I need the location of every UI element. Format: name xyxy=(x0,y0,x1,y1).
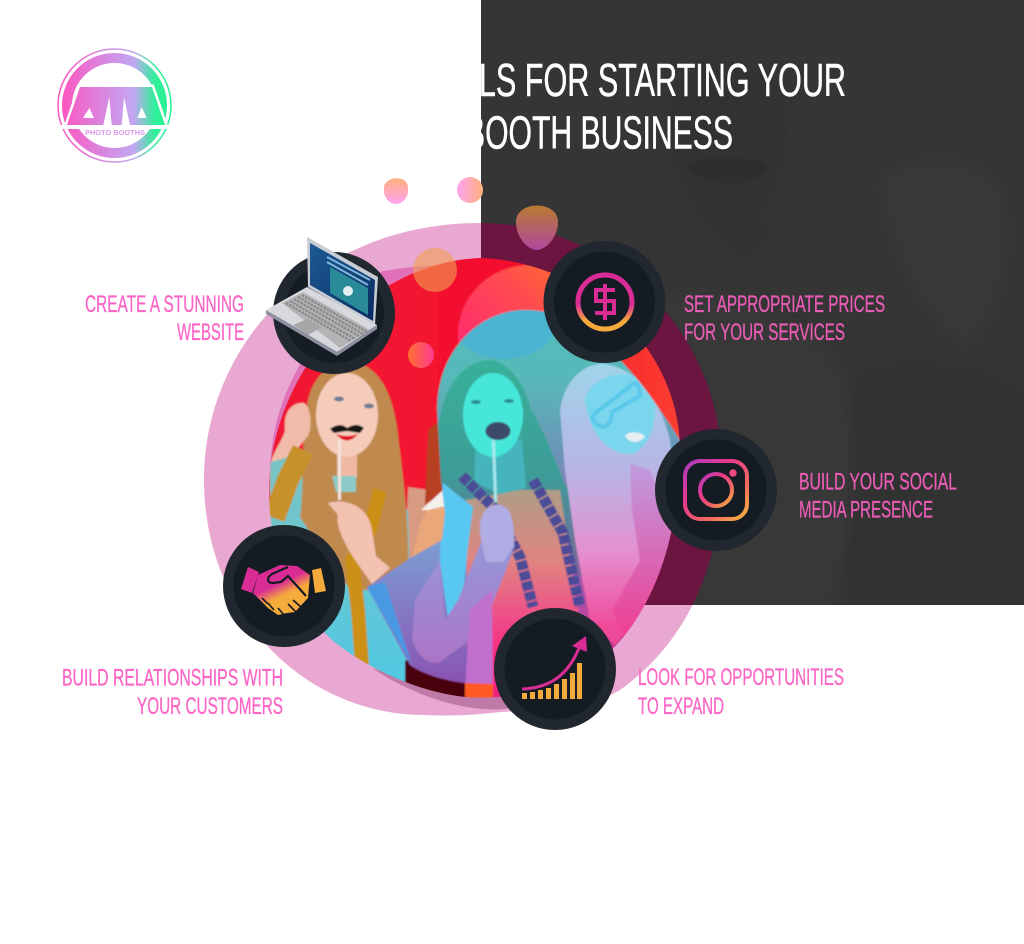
label: build relationships: BUILD RELATIONSHIPS WITH xyxy=(62,664,283,692)
left arm skin of middle woman xyxy=(412,505,446,557)
floating droplets xyxy=(384,177,558,368)
icon: handshake xyxy=(223,525,345,647)
title xyxy=(238,54,846,158)
dark photo panel xyxy=(481,0,1024,605)
icon: dollar coin xyxy=(544,241,666,363)
icon: instagram xyxy=(655,429,777,551)
central photo of three women with props xyxy=(260,255,690,705)
label: look for opportunities: TO EXPAND xyxy=(638,693,724,720)
left woman xyxy=(270,362,445,690)
label: build relationships xyxy=(62,664,283,720)
label: build relationships: YOUR CUSTOMERS xyxy=(137,693,283,720)
icon: laptop xyxy=(266,237,395,374)
label: build your social media presence xyxy=(799,468,957,524)
logo: ATA Photo Booths xyxy=(58,49,171,162)
label: set appropriate prices: FOR YOUR SERVICES xyxy=(684,319,845,346)
decorative blobs behind the photo xyxy=(204,223,722,716)
title: PHOTO BOOTH BUSINESS xyxy=(350,106,733,158)
icon: growth chart xyxy=(494,608,616,730)
label: create a stunning website xyxy=(85,291,244,346)
label: create a stunning website: CREATE A STUNNING xyxy=(85,291,244,318)
label: build your social media presence: MEDIA PRESENCE xyxy=(799,496,933,524)
logo: ATA Photo Booths: PHOTO BOOTHS xyxy=(85,130,145,137)
label: look for opportunities xyxy=(638,664,844,720)
label: set appropriate prices xyxy=(684,291,885,346)
label: look for opportunities: LOOK FOR OPPORTUNITIES xyxy=(638,664,844,691)
red glow circle xyxy=(457,264,551,344)
teal-to-pink gradient overlay with two women xyxy=(366,308,680,698)
label: set appropriate prices: SET APPROPRIATE PRICES xyxy=(684,291,885,318)
maroon skirt and orange hem xyxy=(404,659,466,697)
label: create a stunning website: WEBSITE xyxy=(177,319,244,346)
